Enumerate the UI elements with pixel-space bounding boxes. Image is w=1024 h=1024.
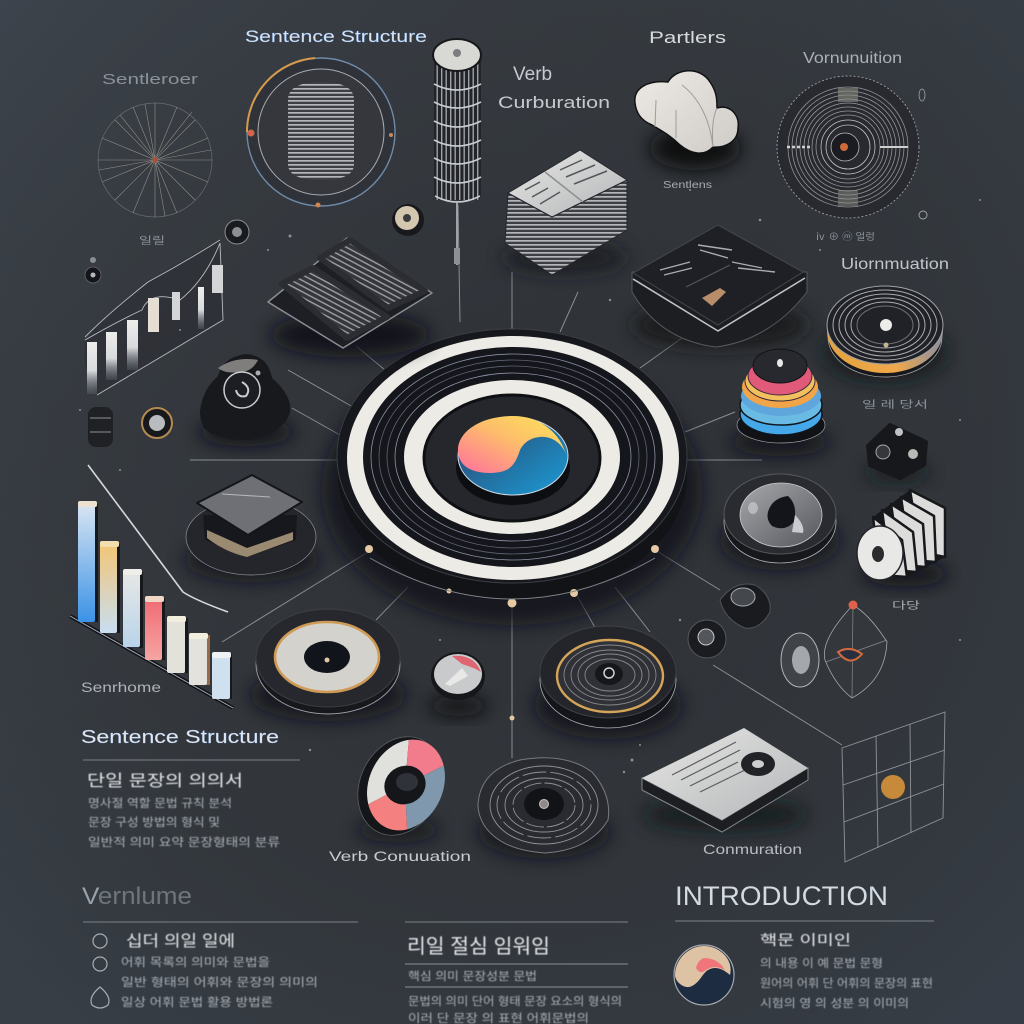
swirl object [198,354,294,446]
vortex disk bottom center [478,758,610,858]
striped cylinder [288,82,354,180]
knob disk right [720,474,840,570]
label: Verb Conjugation bottom: Verb Conuuation [329,848,471,864]
heading: Vocabulary top right: Vornunuition [803,50,902,67]
small label: 다당 [892,600,920,612]
perspective grid [842,712,945,862]
heading: Communication right: Uiornmuation [841,256,949,273]
small label: wheel: 일릴 [139,234,165,247]
central hub: concentric disk with yin-yang [322,329,702,720]
list text: 일상 어휘 문법 활용 방법론 [121,995,273,1009]
line two: 문법의 의미 단어 형태 문장 요소의 형식의 [408,995,622,1008]
stacked paper book [503,150,627,275]
small dial button [428,652,488,716]
hub beads [365,545,659,720]
left bar chart [70,465,233,708]
list text: 일반 형태의 어휘와 문장의 의미의 [121,975,318,989]
white block stack [857,490,949,586]
hub base [338,456,687,600]
text block: Introduction [674,881,934,1010]
list text [121,932,318,1009]
ring segments [367,740,445,830]
body text: 명사절 역할 문법 규칙 분석 [88,796,232,810]
grooves [371,354,655,560]
layered square on platform [184,475,320,582]
decorative specks [79,189,981,773]
body text: 단일 문장의 의의서 [87,772,243,790]
yin-yang icon [674,945,734,1005]
base line [70,616,233,708]
white inner ring [404,380,620,534]
open paper document [642,728,808,832]
connector lines between hub and satellites [190,205,842,758]
list icons [91,934,109,1008]
list text: 십더 의일 일에 [126,932,235,950]
gold ring disk left [250,609,406,721]
heading: Sentence Structure top: Sentence Structure [245,27,427,46]
body text [760,932,933,1010]
segmented tower [433,39,481,265]
small label: 일 레 당서 [862,399,928,411]
text block: center column [405,922,628,1024]
heading: Verb Conjugation top: Curburation [498,93,610,112]
vortex disk top right [777,76,927,219]
color ring [354,736,445,850]
gold ring disk center right [534,626,682,739]
white outer ring [347,336,679,580]
text block: Vocabulary [82,883,358,1009]
line one: 핵심 의미 문장성분 문법 [408,970,537,983]
list text: 어휘 목록의 의미와 문법을 [121,956,270,969]
small label under vortex: ⅳ ⊕ ⓜ 얼렁 [815,231,875,243]
small black gadget [865,425,929,482]
small label under cloud: Sentlens [663,179,712,191]
body text: 의 내용 이 예 문법 문형 [760,957,883,970]
colored layered stack [730,349,830,456]
wheel diagram top left [98,103,212,217]
label: Sentence chart: Senrhome [81,679,161,695]
body text: 원어의 어휘 단 어휘의 문장의 표현 [760,976,933,990]
heading: Partlers: Partlers [649,28,726,47]
yin-yang core [458,416,568,495]
upper left translucent chart [85,240,223,395]
body text: 시험의 영 의 성분 의 이미의 [760,997,909,1010]
body text: 일반적 의미 요약 문장형태의 분류 [88,835,280,849]
cloud [635,71,741,170]
body text: 문장 구성 방법의 형식 및 [88,816,220,829]
text block: Sentence Structure [81,727,300,849]
striped pad book [268,238,432,357]
heading: 리일 절심 임워임 [407,935,550,958]
section heading: Vernlume [82,883,192,910]
body text: 핵문 이미인 [760,932,851,948]
small left gadgets [85,204,424,447]
label: Conjugation: Conmuration [703,841,802,857]
dark book [632,225,808,349]
ring with striped cylinder [247,58,395,208]
wire sphere [781,600,887,698]
stem [456,203,458,265]
grooved disk with orange rim [823,286,947,382]
section heading: Sentence Structure [81,727,279,747]
heading: Verb Conjugation top: Verb [513,64,552,85]
heading: Sentence faint: Sentleroer [102,71,198,88]
body text [87,772,280,849]
heading: INTRODUCTION [675,881,888,911]
small right lower icons [688,584,770,658]
